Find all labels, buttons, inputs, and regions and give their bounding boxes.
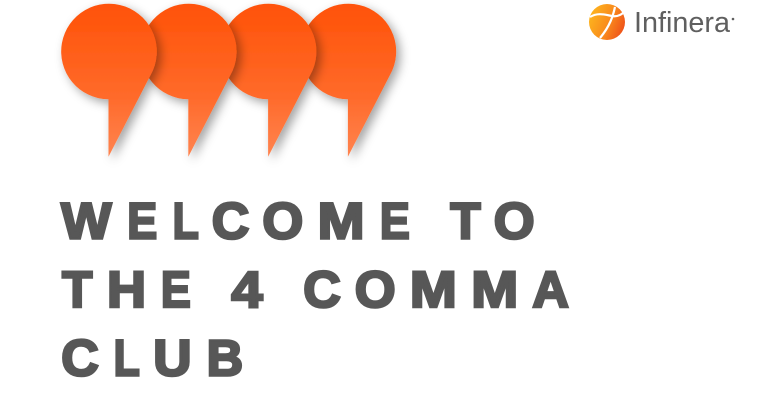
title line 1: C bbox=[212, 192, 249, 249]
title line 3: L bbox=[114, 329, 140, 386]
title line 2: A bbox=[532, 261, 569, 318]
title line 1 bbox=[61, 192, 535, 250]
title line 1: O bbox=[494, 192, 535, 249]
title line 1: E bbox=[380, 194, 410, 250]
title line 2: E bbox=[161, 262, 191, 319]
title line 1: M bbox=[318, 193, 365, 250]
title line 2: 4 bbox=[231, 261, 263, 318]
icon: comma 1 bbox=[61, 4, 157, 157]
logo wordmark: Infinera bbox=[634, 7, 731, 39]
icon: comma 2 bbox=[141, 4, 237, 157]
icon: four overlapping orange commas bbox=[61, 4, 396, 157]
title line 3: B bbox=[207, 329, 243, 386]
title line 2: O bbox=[355, 261, 396, 318]
title: Welcome to the 4 Comma Club bbox=[61, 192, 569, 387]
logo: Infinera bbox=[589, 4, 734, 40]
title line 1: T bbox=[450, 193, 481, 249]
title line 2: M bbox=[471, 261, 518, 318]
title line 2 bbox=[62, 260, 569, 319]
title line 1: L bbox=[173, 192, 199, 249]
title line 3 bbox=[61, 329, 243, 387]
title line 3: U bbox=[153, 330, 192, 387]
title line 2: T bbox=[62, 261, 93, 318]
title line 3: C bbox=[61, 329, 99, 386]
title line 1: O bbox=[262, 192, 303, 249]
title line 2: M bbox=[410, 261, 457, 318]
title line 1: E bbox=[127, 194, 157, 250]
registered mark bbox=[732, 18, 734, 20]
title line 1: W bbox=[61, 193, 112, 250]
icon: Infinera globe mark bbox=[589, 4, 625, 40]
icon: comma 3 bbox=[221, 4, 316, 157]
icon: comma 4 bbox=[301, 4, 396, 157]
title line 2: H bbox=[107, 261, 146, 319]
title line 2: C bbox=[303, 260, 341, 318]
